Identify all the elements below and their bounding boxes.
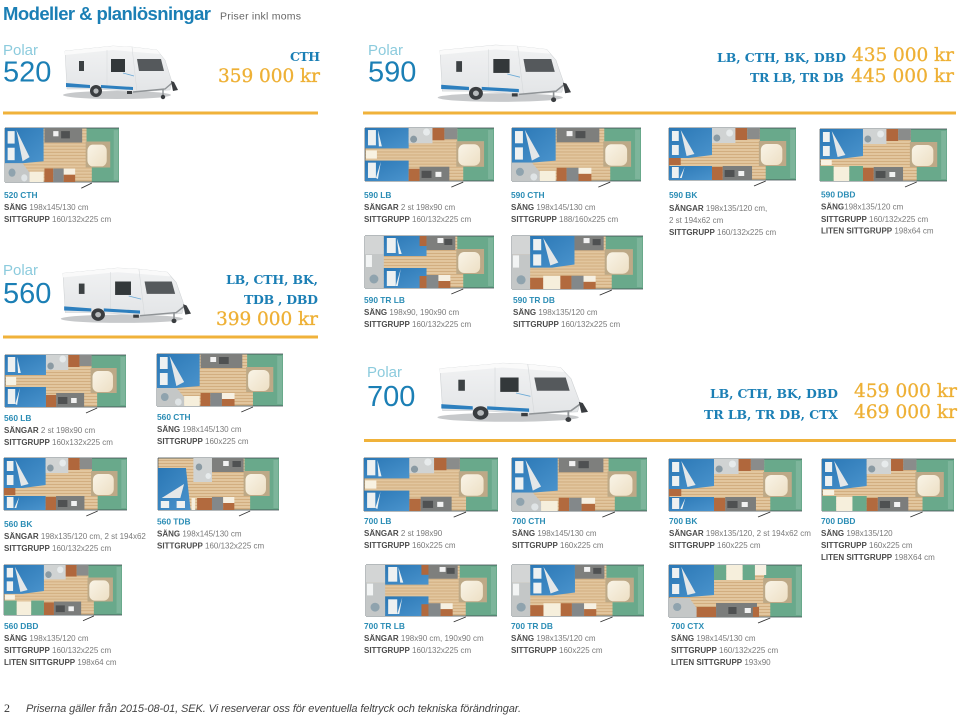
specs: SITTGRUPP	[821, 215, 867, 224]
specs: 2 st 198x90	[399, 529, 443, 538]
floor plan	[4, 458, 127, 516]
specs: 590 TR DB	[513, 295, 555, 305]
specs: SITTGRUPP	[669, 228, 715, 237]
layout codes and prices: 459 000 kr	[854, 381, 957, 402]
floor plan	[365, 236, 494, 294]
floor plan	[669, 459, 802, 517]
specs: LITEN SITTGRUPP	[671, 658, 743, 667]
specs: 198x135/120 cm, 2 st 194x62	[39, 532, 146, 541]
specs: SITTGRUPP	[821, 541, 867, 550]
specs: SÄNG	[821, 529, 844, 538]
specs: 198x135/120 cm	[844, 202, 904, 212]
caravan illustration	[438, 45, 571, 102]
caravan illustration	[63, 46, 178, 99]
specs: 160/132x225 cm	[867, 215, 928, 224]
floor plan	[669, 128, 796, 186]
specs: 160x225 cm	[557, 646, 603, 655]
specs: 160x225 cm	[410, 541, 456, 550]
specs: SITTGRUPP	[364, 320, 410, 329]
model name: Polar	[3, 262, 38, 279]
specs: 700 CTX	[671, 621, 704, 631]
specs: 520 CTH	[4, 190, 38, 200]
specs: 160x225 cm	[715, 541, 761, 550]
specs: 160x225 cm	[867, 541, 913, 550]
specs: 590 LB	[364, 190, 391, 200]
specs: 160x132x225 cm	[50, 438, 113, 447]
layout codes and price: 399 000 kr	[216, 309, 318, 330]
specs: SITTGRUPP	[671, 646, 717, 655]
floor plan	[512, 458, 647, 517]
specs: SITTGRUPP	[364, 646, 410, 655]
specs: 2 st 198x90 cm	[39, 426, 95, 435]
specs: 160/132x225 cm	[203, 542, 264, 550]
specs: SÄNG	[512, 529, 535, 538]
specs: 160x225 cm	[203, 437, 249, 446]
specs: SÄNGAR	[669, 204, 704, 213]
specs: SÄNG	[511, 203, 534, 212]
specs: 198X64 cm	[892, 553, 935, 562]
specs: 160/132x225 cm	[410, 320, 471, 329]
divider 590	[363, 112, 956, 114]
layout codes and price	[216, 272, 318, 330]
specs: 160x225 cm	[558, 541, 604, 550]
plan: 700 DBD	[821, 459, 954, 562]
specs: SITTGRUPP	[364, 541, 410, 550]
model name: Polar	[3, 42, 38, 59]
specs: SÄNG	[4, 203, 27, 212]
floor plan	[157, 354, 283, 412]
specs: 188/160x225 cm	[557, 215, 618, 224]
plan: 700 TR DB	[511, 565, 644, 655]
floor plan	[5, 355, 126, 413]
specs: SÄNGAR	[364, 203, 399, 212]
specs: 160/132x225 cm	[717, 646, 778, 655]
floor plan	[822, 459, 954, 517]
specs: 198x135/120 cm,	[704, 204, 767, 213]
specs: 198x145/130 cm	[180, 425, 242, 434]
specs: LITEN SITTGRUPP	[4, 658, 76, 667]
floor plan	[512, 236, 643, 295]
specs: 198x135/120, 2 st 194x62 cm	[704, 529, 811, 538]
layout codes and price: TDB , DBD	[244, 292, 318, 307]
specs: SITTGRUPP	[4, 438, 50, 447]
title: Modeller & planlösningar	[3, 3, 211, 24]
model name: Polar	[367, 364, 402, 381]
specs: SITTGRUPP	[4, 215, 50, 224]
layout codes and price: LB, CTH, BK,	[226, 272, 318, 287]
specs: LITEN SITTGRUPP	[821, 226, 893, 236]
specs: SITTGRUPP	[4, 544, 50, 553]
specs: SITTGRUPP	[511, 646, 557, 655]
plan: 590 DBD	[820, 129, 947, 236]
plan: 560 CTH	[157, 354, 283, 446]
specs: 198x135/120	[844, 529, 893, 538]
specs: 160/132x225 cm	[410, 646, 471, 655]
plan: 560 TDB	[157, 458, 279, 550]
specs: SITTGRUPP	[669, 541, 715, 550]
specs: SITTGRUPP	[511, 215, 557, 224]
layout codes and prices: 435 000 kr	[852, 45, 954, 66]
plan: 700 TR LB	[364, 565, 497, 655]
divider 560	[3, 336, 318, 338]
specs: SÄNG	[4, 634, 27, 643]
floor plan	[158, 458, 279, 516]
specs: 590 TR LB	[364, 295, 405, 305]
specs: 160/132x225 cm	[50, 544, 111, 553]
subtitle: price note: Priser inkl moms	[220, 10, 301, 22]
layout codes and prices	[717, 45, 954, 87]
layout codes and prices: LB, CTH, BK, DBD	[717, 50, 846, 65]
specs: 590 DBD	[821, 190, 855, 200]
model header: Polar 560	[3, 262, 318, 330]
floor plan	[364, 458, 498, 517]
model header: Polar 700	[367, 363, 957, 423]
specs: 700 DBD	[821, 516, 855, 526]
specs: SÄNG	[157, 530, 180, 538]
specs: SITTGRUPP	[157, 437, 203, 446]
specs: 2 st 194x62 cm	[669, 216, 724, 225]
specs: SITTGRUPP	[157, 542, 203, 550]
specs: 560 DBD	[4, 621, 38, 631]
floor plan	[5, 128, 119, 188]
model name: Polar	[368, 42, 403, 59]
layout codes and prices: 469 000 kr	[854, 402, 957, 423]
specs: 198x90, 190x90 cm	[387, 308, 460, 317]
specs: SÄNGAR	[364, 634, 399, 643]
specs: SÄNGAR	[669, 529, 704, 538]
model number: 590	[368, 56, 416, 88]
layout codes and prices: LB, CTH, BK, DBD	[710, 386, 838, 401]
specs: SÄNG	[157, 425, 180, 434]
specs: SÄNGAR	[4, 426, 39, 435]
specs: 700 TR DB	[511, 621, 553, 631]
caravan illustration	[61, 268, 191, 323]
plan: 560 DBD	[4, 565, 122, 667]
model header: Polar 520	[3, 42, 320, 99]
layout codes and prices: TR LB, TR DB	[750, 70, 844, 85]
specs: 160/132x225 cm	[50, 215, 111, 224]
page number: 2	[4, 701, 10, 715]
plan: 590 TR LB	[364, 236, 494, 329]
layout codes and prices	[704, 381, 957, 423]
specs: SITTGRUPP	[512, 541, 558, 550]
specs: 198x135/120 cm	[27, 634, 89, 643]
floor plan	[4, 565, 122, 621]
specs: 700 LB	[364, 516, 391, 526]
model header: Polar 590	[368, 42, 954, 102]
model number: 700	[367, 381, 415, 413]
specs: 193x90	[742, 658, 771, 667]
specs: 160/132x225 cm	[715, 228, 776, 237]
specs: SITTGRUPP	[4, 646, 50, 655]
specs: SÄNG	[671, 634, 694, 643]
specs: SÄNG	[821, 202, 844, 212]
specs: 700 CTH	[512, 516, 546, 526]
specs: SITTGRUPP	[364, 215, 410, 224]
specs: 198x135/120 cm	[534, 634, 596, 643]
plan: 590 TR DB	[512, 236, 643, 329]
specs: 160/132x225 cm	[559, 320, 620, 329]
plan: 520 CTH	[4, 128, 119, 224]
specs: 590 BK	[669, 190, 697, 200]
specs: 160/132x225 cm	[410, 215, 471, 224]
specs: 198x135/120 cm	[536, 308, 598, 317]
specs: 560 BK	[4, 519, 32, 529]
specs: 700 BK	[669, 516, 697, 526]
specs: 198x64 cm	[75, 658, 117, 667]
floor plan	[365, 128, 494, 187]
plan: 560 LB	[4, 355, 126, 447]
plan: 700 CTX	[669, 565, 802, 667]
specs: SÄNGAR	[4, 532, 39, 541]
floor plan	[820, 129, 947, 187]
model number: 560	[3, 278, 51, 310]
plan: 700 BK	[669, 459, 811, 550]
plan: 590 CTH	[511, 128, 641, 224]
layout codes and prices: 445 000 kr	[851, 66, 954, 87]
plan: 590 BK	[669, 128, 796, 237]
specs: SÄNGAR	[364, 529, 399, 538]
plan: 590 LB	[364, 128, 494, 224]
specs: 2 st 198x90 cm	[399, 203, 455, 212]
specs: LITEN SITTGRUPP	[821, 553, 893, 562]
specs: 700 TR LB	[364, 621, 405, 631]
specs: 560 CTH	[157, 412, 191, 422]
specs: 590 CTH	[511, 190, 545, 200]
specs: 198x145/130 cm	[694, 634, 756, 643]
specs: 198x145/130 cm	[534, 203, 596, 212]
model number: 520	[3, 56, 51, 88]
floor plan	[512, 128, 641, 187]
price: 359 000 kr	[218, 66, 320, 87]
plan: 700 CTH	[512, 458, 647, 550]
layout codes and prices: TR LB, TR DB, CTX	[704, 407, 838, 422]
divider 520	[3, 112, 318, 114]
specs: SITTGRUPP	[513, 320, 559, 329]
specs: SÄNG	[511, 634, 534, 643]
specs: 198x64 cm	[892, 226, 934, 236]
floor plan	[669, 565, 802, 623]
floor plan	[366, 565, 497, 622]
specs: 198x145/130 cm	[27, 203, 89, 212]
divider 700	[364, 439, 956, 442]
specs: 198x145/130 cm	[535, 529, 597, 538]
plan: 560 BK	[4, 458, 146, 553]
footnote: Priserna gäller från 2015-08-01, SEK. Vi reserverar oss för eventuella feltryck och tekniska förändringar.	[26, 703, 521, 715]
specs: SÄNG	[513, 308, 536, 317]
caravan illustration	[437, 363, 588, 422]
specs: 198x90 cm, 190x90 cm	[399, 634, 484, 643]
specs: 160/132x225 cm	[50, 646, 111, 655]
layout code: CTH	[290, 49, 320, 64]
specs: 560 LB	[4, 413, 31, 423]
specs: 198x145/130 cm	[180, 530, 242, 538]
plan: 700 LB	[364, 458, 498, 550]
floor plan	[512, 565, 644, 622]
specs: 560 TDB	[157, 516, 191, 526]
specs: SÄNG	[364, 308, 387, 317]
